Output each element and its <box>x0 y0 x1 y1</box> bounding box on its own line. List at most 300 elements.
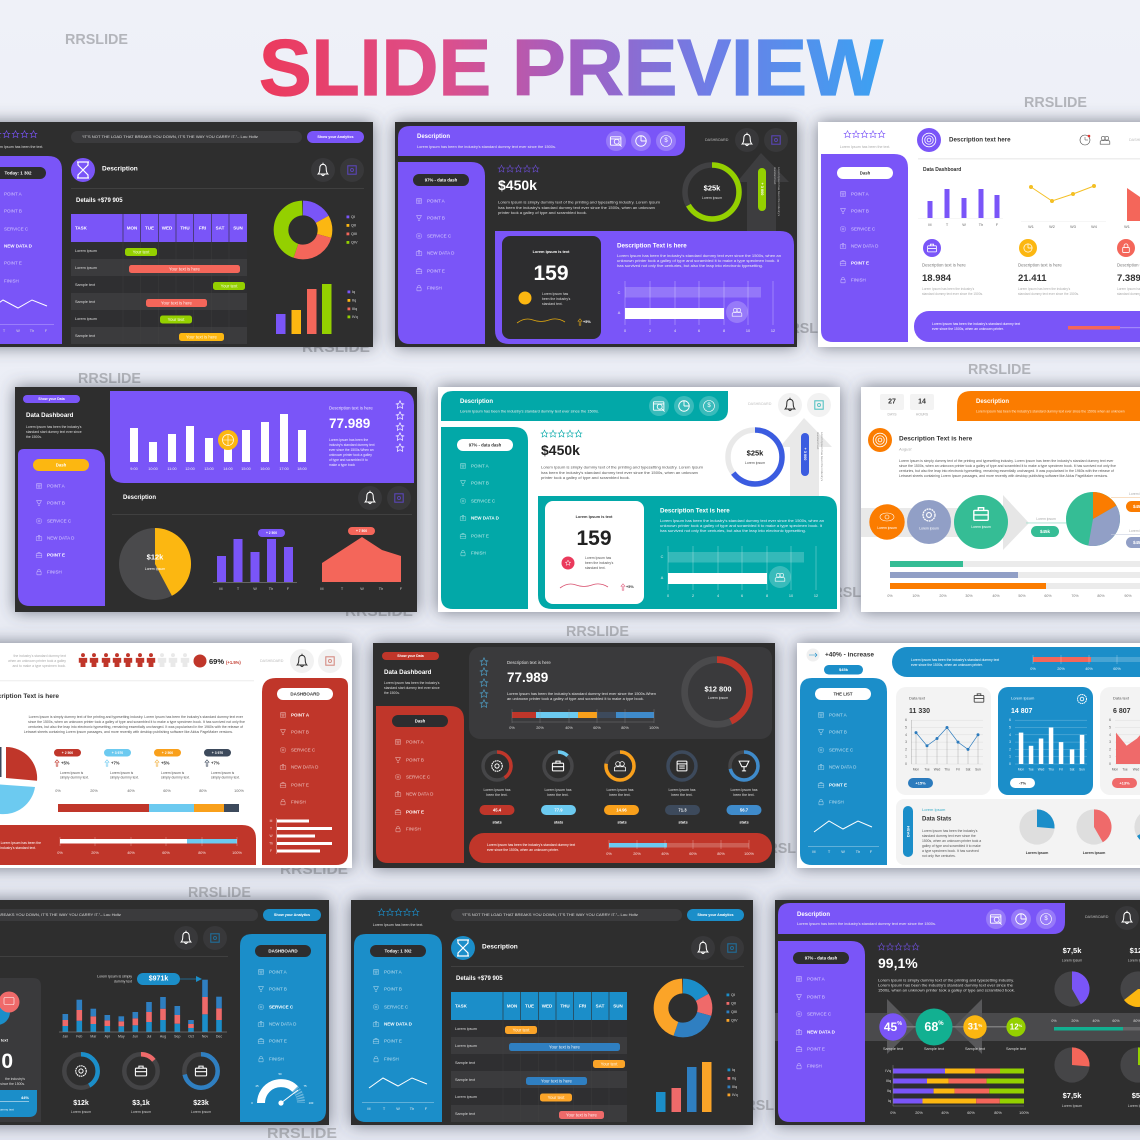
gauge: 25 <box>255 1084 259 1088</box>
pie: top left: $7,5k <box>1063 946 1082 955</box>
sidebar menu <box>280 712 319 805</box>
stars <box>541 430 582 437</box>
progress bars: 40% <box>992 594 1000 598</box>
stat 5 <box>726 752 762 824</box>
header icons <box>606 131 676 151</box>
sidebar pill: Dash <box>415 718 426 724</box>
bar legend: Iq <box>352 290 355 294</box>
summary text <box>329 406 375 467</box>
horizontal mini bars <box>269 818 332 854</box>
sidebar menu: POINT E <box>807 1046 825 1052</box>
sparkline axis: F <box>870 850 873 854</box>
stacked column chart: Feb <box>76 1034 82 1038</box>
sidebar menu: POINT E <box>829 782 847 788</box>
hour labels <box>130 467 307 471</box>
bottom band: 60% <box>162 851 170 855</box>
sparkline <box>369 1078 427 1088</box>
task table: Your text is here <box>566 1112 598 1118</box>
metric 2: Lorem Ipsum is <box>110 771 133 775</box>
task table: Your text is here <box>541 1078 573 1084</box>
sidebar pill <box>457 439 513 451</box>
stacked bars: 60% <box>967 1111 975 1115</box>
stats panel: standard dummy text ever since the <box>922 834 976 838</box>
gauge: 50 <box>278 1072 282 1076</box>
stat 2: 77.9 <box>554 808 563 812</box>
stat card: +5% <box>626 585 634 589</box>
bar chart: Th <box>979 223 983 227</box>
metric 4: + 3 970 <box>212 751 223 755</box>
donut legend: QI <box>351 215 355 219</box>
icon: bell <box>1115 906 1139 930</box>
header band: Description <box>797 912 830 918</box>
circle: gear <box>907 500 951 544</box>
bottom band: 0% <box>57 851 63 855</box>
icon: square <box>387 486 411 510</box>
horizontal bar chart: 12 <box>814 594 818 598</box>
donut 2 <box>124 1054 158 1114</box>
stat 5: Lorem Ipsum has <box>730 788 758 792</box>
stacked column chart: Dec <box>216 1034 222 1038</box>
summary text: ever since the 1500s.When an <box>329 448 374 452</box>
sidebar menu: POINT E <box>269 1038 287 1044</box>
pie: bottom left <box>1054 1047 1090 1108</box>
icon: square <box>807 393 831 417</box>
bar legend <box>728 1068 738 1097</box>
panel paragraph: Lorem Ipsum has been the industry's standard dummy text ever since the 1500s, when an <box>617 254 781 258</box>
summary text: of type and scrambled it to <box>329 458 368 462</box>
card: bar chart: Tue <box>1028 768 1034 772</box>
header band: Description <box>976 399 1009 405</box>
stacked column chart: Jun <box>132 1034 138 1038</box>
stacked column chart: Jan <box>62 1034 68 1038</box>
donut chart <box>281 208 325 252</box>
summary text: unknown printer took a galley <box>329 453 372 457</box>
stat 1: Lorem Ipsum has been the industry's <box>922 287 975 291</box>
dashboard label: DASHBOARD <box>748 402 772 406</box>
stat 1: 45.4 <box>493 808 502 812</box>
watermarks: RRSLIDE <box>779 321 842 337</box>
circle 31: % <box>978 1022 982 1028</box>
circle 12 <box>1006 1017 1027 1051</box>
sparkline axis <box>0 324 54 333</box>
progress bars: 60% <box>1044 594 1052 598</box>
horizontal bar chart: A <box>618 311 621 315</box>
stat 3: Lorem Ipsum has <box>606 788 634 792</box>
sidebar menu: POINT B <box>427 216 445 220</box>
task table: MON <box>127 226 137 230</box>
card: bar chart: Lorem Ipsum <box>1011 696 1035 700</box>
horizontal bar chart: C <box>618 291 621 295</box>
horizontal mini bars: M <box>270 819 273 823</box>
intro text: the 1500s. <box>26 435 42 439</box>
stats panel: Lorem Ipsum <box>922 807 946 812</box>
card: line chart: Sat <box>966 768 971 772</box>
pie chart: Lorem Ipsum <box>145 567 165 571</box>
donut 2: Lorem ipsum <box>131 1110 151 1114</box>
callout: Lorem Ipsum is simply <box>97 974 132 978</box>
card: bar chart: Fri <box>1059 768 1063 772</box>
circle 45: Sample text <box>883 1047 904 1051</box>
button: Show your Data <box>38 397 65 401</box>
stat 3: been the text. <box>609 793 631 797</box>
progress bars: 0% <box>887 594 893 598</box>
stats panel: not only five centuries. <box>922 854 956 858</box>
metric 3 <box>154 749 190 780</box>
area chart: W1 <box>1124 225 1130 229</box>
donut 1 <box>64 1054 98 1114</box>
hour labels: 11:00 <box>167 467 177 471</box>
bottom band: 100% <box>744 852 754 856</box>
hours counter: 14 <box>918 398 926 406</box>
upper callout <box>1111 492 1140 512</box>
header band <box>398 126 685 156</box>
horizontal bar chart: 4 <box>717 594 719 598</box>
horizontal bar chart: 12 <box>771 329 775 333</box>
pie 1: Lorem Ipsum <box>1026 851 1048 855</box>
sparkline axis: W <box>396 1107 400 1111</box>
quote bar: “IT'S NOT THE LOAD THAT BREAKS YOU DOWN, IT'S THE WAY YOU CARRY IT.”– Lou Holtz <box>462 913 638 917</box>
horizontal mini bars: Th <box>269 842 273 846</box>
sparkline axis: T <box>828 850 831 854</box>
hour labels: 15:00 <box>241 467 251 471</box>
card: line chart <box>896 687 991 795</box>
card: line chart: Tue <box>924 768 930 772</box>
stacked bar: 60% <box>163 789 171 793</box>
date: August <box>898 446 912 452</box>
stat 1 <box>480 752 514 824</box>
sidebar menu: POINT A <box>291 712 310 718</box>
stat 1: 18.984 <box>922 273 952 284</box>
header band: Lorem Ipsum has been the industry's standard dummy text ever since the 1500s. <box>797 922 936 926</box>
big value: $450k <box>498 177 537 193</box>
header band <box>441 391 728 421</box>
circle 31: Sample text <box>965 1047 986 1051</box>
sidebar menu: SERVICE C <box>406 774 431 780</box>
quote bar: “IT'S NOT THE LOAD THAT BREAKS YOU DOWN, IT'S THE WAY YOU CARRY IT.”– Lou Holtz <box>82 135 258 139</box>
sidebar menu: FINISH <box>471 550 486 556</box>
stacked bar: 60% <box>593 726 601 730</box>
stars <box>396 401 404 451</box>
sparkline axis: F <box>45 329 48 333</box>
sidebar menu: POINT E <box>406 810 424 814</box>
circle 68: 68 <box>924 1020 938 1034</box>
sidebar pill: Today: 1 302 <box>5 170 32 176</box>
icon: bell <box>778 393 802 417</box>
horizontal bar chart: 6 <box>698 329 700 333</box>
bottom band: Lorem Ipsum has been the industry's standard dummy text <box>487 843 575 847</box>
stat card: Lorem Ipsum has <box>585 556 611 560</box>
task table: Sample text <box>75 283 96 287</box>
card: area chart: 5 <box>1109 726 1111 730</box>
sidebar menu: NEW DATA D <box>807 1030 836 1034</box>
panel: slide 7 red light <box>0 643 352 868</box>
blue pill <box>801 433 809 476</box>
panel: slide 2 dark purple summary <box>395 122 797 347</box>
title: SLIDE <box>259 23 491 112</box>
sidebar menu: NEW DATA D <box>829 764 857 770</box>
sidebar menu: POINT B <box>384 986 402 992</box>
donut 2: $3,1k <box>132 1100 150 1107</box>
top band: 60% <box>1113 667 1121 671</box>
bar chart: T <box>237 587 240 591</box>
area chart: T <box>341 587 344 591</box>
sidebar pill: 97% - data dash <box>425 178 458 182</box>
panel: slide 11 dark blue task table <box>351 900 753 1125</box>
task table: Your text <box>601 1062 618 1066</box>
stat 3: 14.96 <box>616 808 627 812</box>
circle: gift <box>954 495 1008 549</box>
sidebar menu: NEW DATA D <box>269 1022 297 1026</box>
stacked bar: 20% <box>536 726 544 730</box>
card: bar chart: -7% <box>1019 780 1026 786</box>
sidebar menu: FINISH <box>384 1056 399 1062</box>
icon: hourglass <box>71 158 95 182</box>
bottom band: 80% <box>717 852 725 856</box>
line chart <box>1021 184 1106 229</box>
paragraph <box>24 715 245 734</box>
vertical caption: standard text <box>816 432 820 450</box>
stat 1 <box>922 239 983 296</box>
heading: Data Dashboard <box>384 669 432 676</box>
hourly bars <box>130 414 306 462</box>
stacked bar: 100% <box>234 789 244 793</box>
sidebar <box>262 678 348 865</box>
stat card: standard text. <box>542 302 563 306</box>
paragraph: has been the industry's standard dummy text ever since the 1500s, when an unknown <box>541 471 698 475</box>
stars <box>480 658 488 707</box>
summary text: an unknown printer took a galley of type and scrambled it to make a type book. <box>507 697 644 701</box>
sidebar <box>240 934 326 1122</box>
circle 31: 31 <box>968 1022 978 1032</box>
left card: 0 <box>1 1050 13 1073</box>
sidebar <box>376 706 464 863</box>
task table: FRI <box>579 1004 586 1008</box>
connector <box>1026 522 1067 524</box>
sidebar menu <box>373 970 413 1062</box>
task table: THU <box>560 1004 570 1008</box>
horizontal bar chart <box>661 546 818 598</box>
details heading: Details +$79 905 <box>456 976 503 982</box>
task table: TUE <box>145 226 154 230</box>
donut value: Lorem ipsum <box>702 196 722 200</box>
sparkline axis <box>808 846 879 854</box>
sidebar menu: SERVICE C <box>851 226 876 232</box>
bar legend: IVq <box>732 1093 738 1097</box>
stars <box>498 165 539 172</box>
metric 2: +7% <box>111 760 120 766</box>
pie 3 <box>1134 809 1140 845</box>
stacked bar: 20% <box>90 789 98 793</box>
watermarks: RRSLIDE <box>188 885 251 901</box>
header band: Lorem Ipsum has been the industry's standard dummy text ever since the 1500s. <box>460 410 599 414</box>
left card: 44% <box>21 1095 29 1100</box>
stacked bars: IVq <box>885 1069 891 1073</box>
intro text: Lorem Ipsum has been the industry's <box>26 425 82 429</box>
progress bars: 30% <box>965 594 973 598</box>
sparkline axis: M <box>367 1107 371 1111</box>
left card: since the 1500s. <box>0 1082 25 1086</box>
stacked bars: 20% <box>915 1111 923 1115</box>
icon: target <box>917 128 941 152</box>
watermarks: RRSLIDE <box>78 371 141 387</box>
hours counter: HOURS <box>916 412 929 416</box>
top band: ever since the 1500s, when an unknown printer. <box>911 663 983 667</box>
sidebar menu: POINT E <box>47 552 65 558</box>
card: area chart: Mon <box>1112 768 1118 772</box>
header icons <box>649 396 719 416</box>
sidebar menu: SERVICE C <box>829 748 854 752</box>
area chart: + 7 500 <box>356 529 367 533</box>
stacked bar: 40% <box>127 789 135 793</box>
sidebar menu: POINT A <box>4 192 22 196</box>
icon: square <box>318 649 342 673</box>
sidebar menu: NEW DATA D <box>47 536 75 540</box>
sidebar <box>441 427 528 609</box>
line chart: W1 <box>1028 225 1034 229</box>
panel: slide 1 dark purple task table <box>0 122 373 347</box>
bar chart <box>656 1062 712 1112</box>
header band: Lorem Ipsum has been the industry's standard dummy text ever since the 1500s. <box>417 145 556 149</box>
sidebar menu: FINISH <box>269 1056 284 1062</box>
bar legend: IIIq <box>732 1085 737 1089</box>
summary text: Description text is here <box>507 660 551 665</box>
task table: Sample text <box>455 1078 476 1082</box>
summary text: make a type book <box>329 463 355 467</box>
hour labels: 10:00 <box>148 467 158 471</box>
stacked column chart <box>59 980 227 1038</box>
circle: gear: Lorem ipsum <box>919 526 939 530</box>
donut legend: QIII <box>351 232 357 236</box>
horizontal bar chart: 6 <box>741 594 743 598</box>
stat 2: 21.411 <box>1018 273 1047 284</box>
sidebar menu: SERVICE C <box>269 1004 294 1010</box>
bar legend: Iq <box>732 1068 735 1072</box>
dashboard label: DASHBOARD <box>1085 915 1109 919</box>
horizontal bar chart: 8 <box>723 329 725 333</box>
stacked bar: 0% <box>509 726 515 730</box>
sidebar menu: POINT A <box>471 464 489 468</box>
large donut value <box>704 684 732 700</box>
intro text: standard start dummy text ever since <box>26 430 82 434</box>
stats panel: Lorem Ipsum has been the industry's <box>922 829 978 833</box>
task table: SAT <box>216 226 225 230</box>
stat 1: stats <box>492 820 502 824</box>
sidebar menu: POINT E <box>471 534 489 538</box>
sidebar menu: POINT B <box>471 480 489 486</box>
sidebar menu: FINISH <box>4 278 19 284</box>
sidebar menu <box>416 198 455 291</box>
bar chart: Th <box>269 587 273 591</box>
icon: bell <box>358 486 382 510</box>
card: bar chart: 0 <box>1009 762 1011 766</box>
panel paragraph: unknown printer took a galley of type and scrambled it to make a type specimen book. It <box>617 259 779 263</box>
hour labels: 9:00 <box>130 467 138 471</box>
stacked bars: 0% <box>890 1111 896 1115</box>
header band <box>778 903 1065 934</box>
metric 3: simply dummy text. <box>161 776 190 780</box>
hour labels: 16:00 <box>260 467 270 471</box>
green pill: + 3 000 <box>760 183 764 195</box>
panel: slide 5 teal summary <box>438 387 840 612</box>
donut legend <box>346 215 358 245</box>
donut value: $25k <box>704 184 721 192</box>
area chart <box>1124 188 1140 229</box>
donut legend: QII <box>351 224 356 228</box>
icon: square <box>340 158 364 182</box>
donut value: Lorem ipsum <box>745 461 765 465</box>
circle 68: % <box>938 1021 944 1027</box>
sidebar menu: POINT A <box>47 484 65 488</box>
bar chart <box>276 284 332 334</box>
icon: clock <box>1080 135 1090 145</box>
card: bar chart: Mon <box>1018 768 1024 772</box>
stat 1: standard dummy text ever since the 1500s. <box>922 292 983 296</box>
stacked bar: 40% <box>565 726 573 730</box>
intro text: when an unknown printer took a galley <box>8 659 66 663</box>
exploded pie <box>0 747 37 814</box>
panel: slide 8 dark red stats <box>373 643 775 868</box>
button: Show your Analytics <box>317 135 354 139</box>
card: area chart: 3 <box>1109 740 1111 744</box>
bottom band: ever since the 1500s, when an unknown printer. <box>487 848 559 852</box>
header band: Description <box>460 399 493 405</box>
card: bar chart: 4 <box>1009 733 1011 737</box>
button <box>687 909 744 921</box>
sparkline axis: W <box>16 329 20 333</box>
stat 1: Description text is here <box>922 262 966 268</box>
sidebar menu: POINT B <box>406 758 424 762</box>
card: area chart: Wed <box>1133 768 1139 772</box>
card: line chart: 4 <box>905 733 907 737</box>
metric 4 <box>204 749 240 780</box>
stats panel: 1500s, when an unknown printer took a <box>922 839 981 843</box>
card: line chart: 11 330 <box>909 708 930 715</box>
intro text: standard start dummy text ever since <box>384 686 440 690</box>
donut legend <box>726 993 738 1023</box>
donut legend: QIV <box>731 1019 738 1023</box>
watermarks: RRSLIDE <box>968 362 1031 378</box>
button: Show your Analytics <box>274 913 310 917</box>
sidebar menu: POINT E <box>427 268 445 274</box>
task table: Lorem ipsum <box>75 266 97 270</box>
stats panel: galley of type and scrambled it to make <box>922 844 981 848</box>
task table: Your text is here <box>161 300 193 306</box>
sparkline axis: W <box>841 850 845 854</box>
button <box>382 652 439 660</box>
pie: top left: Lorem Ipsum <box>1062 958 1082 962</box>
card: area chart <box>1100 687 1140 795</box>
sidebar menu: FINISH <box>406 826 421 832</box>
paragraph: printer took a galley of type and scrambled book. <box>541 476 630 480</box>
stat 4: Lorem Ipsum has <box>668 788 696 792</box>
watermarks: RRSLIDE <box>566 624 629 640</box>
large donut <box>685 660 749 724</box>
sidebar menu: POINT A <box>829 712 847 718</box>
pie 1 <box>1019 809 1055 855</box>
bottom band: Lorem Ipsum has been the <box>1 841 41 845</box>
sidebar pill <box>33 459 89 471</box>
sparkline <box>0 300 47 310</box>
watermarks: RRSLIDE <box>280 862 348 878</box>
task table: Sample text <box>75 334 96 338</box>
card: line chart: 2 <box>905 747 907 751</box>
card: line chart: Fri <box>956 768 960 772</box>
progress axis: 60% <box>1112 1019 1120 1023</box>
sidebar menu: FINISH <box>291 800 306 804</box>
hour labels: 18:00 <box>297 467 307 471</box>
heading: Description <box>102 166 138 172</box>
donut chart <box>661 986 705 1030</box>
